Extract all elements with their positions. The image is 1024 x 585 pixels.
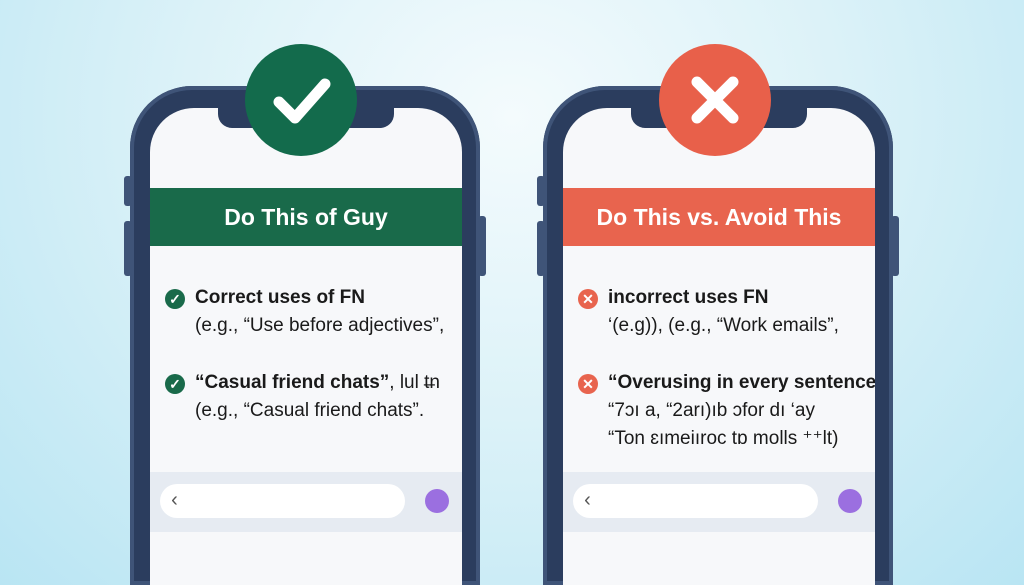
item: casual chats: (e.g., “Casual friend chats”. [195, 400, 424, 421]
item: incorrect uses: ✕ [582, 291, 594, 307]
icon: x circle [659, 44, 771, 156]
header band: Do This vs. Avoid This [563, 188, 875, 246]
icon: check circle [245, 44, 357, 156]
item: overusing: ✕ [582, 376, 594, 392]
input bar [563, 472, 875, 532]
item: incorrect uses: incorrect uses FN [608, 287, 768, 308]
header band: Do This of Guy: Do This of Guy [224, 204, 388, 230]
item: overusing [578, 372, 875, 449]
item: incorrect uses: ‘(e.g)), (e.g., “Work emails”, [608, 315, 839, 336]
item: correct uses: ✓ [169, 291, 181, 307]
item: overusing: “Ton ɛımeiıroc tɒ molls ⁺⁺lt) [608, 428, 838, 449]
item: casual chats: ✓ [169, 376, 181, 392]
input bar: ‹ [171, 489, 178, 511]
input bar: ‹ [584, 489, 591, 511]
item: correct uses [165, 287, 444, 336]
item: casual chats: “Casual friend chats”, lul t̶n [195, 372, 440, 393]
item: casual chats [165, 372, 440, 421]
item: correct uses: (e.g., “Use before adjectives”, [195, 315, 444, 336]
item: incorrect uses [578, 287, 839, 336]
header band: Do This of Guy [150, 188, 462, 246]
header band: Do This vs. Avoid This: Do This vs. Avoid This [597, 204, 841, 230]
item: overusing: “7ɔı a, “2arı)ıb ɔfor dı ‘ay [608, 400, 815, 421]
input bar [150, 472, 462, 532]
phone: do this [130, 86, 480, 585]
item: correct uses: Correct uses of FN [195, 287, 365, 308]
phone: avoid this [543, 86, 893, 585]
